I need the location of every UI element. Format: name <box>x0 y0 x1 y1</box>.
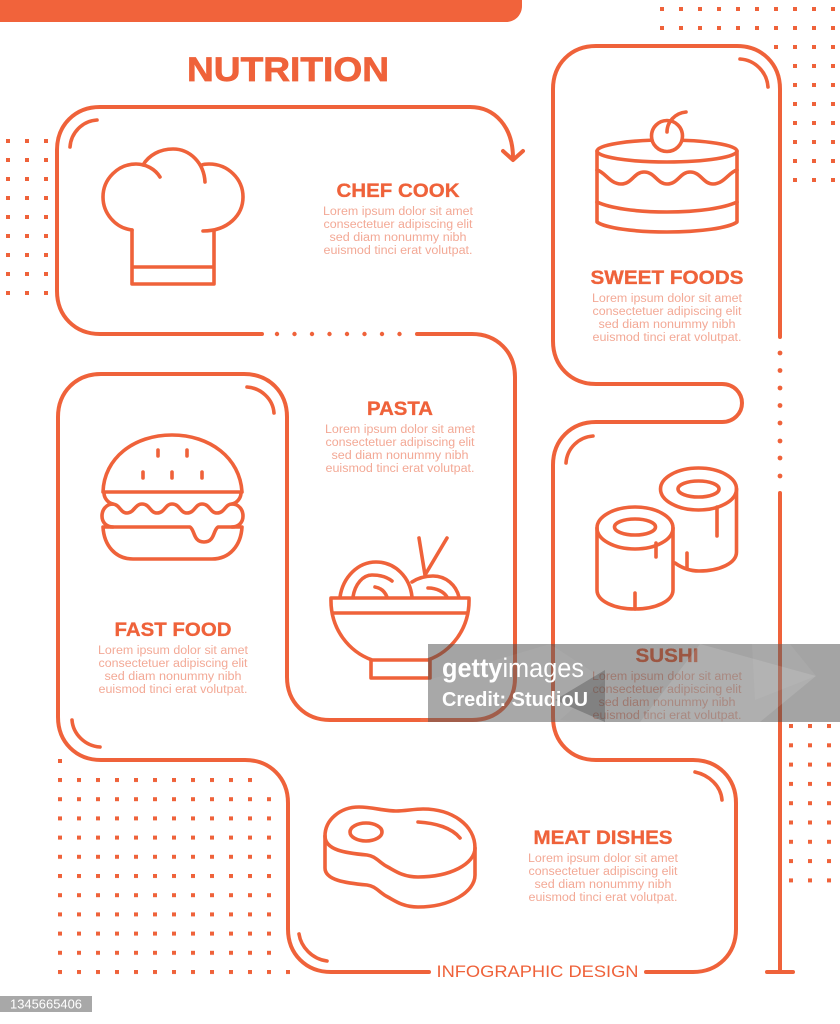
dot grid: left <box>6 139 50 297</box>
panel: sushi <box>566 436 743 722</box>
image id tag: 1345665406 <box>10 998 82 1012</box>
connector line: snaking path through all panels <box>57 46 793 972</box>
text: chef cook description <box>323 206 474 257</box>
text: sweet foods description: euismod tinci erat volutpat. <box>592 332 742 344</box>
text: meat dishes description: euismod tinci erat volutpat. <box>528 892 678 904</box>
top banner bar <box>0 0 522 22</box>
text: sweet foods description: consectetuer adipiscing elit <box>592 306 742 318</box>
heading: fast food: FAST FOOD <box>114 620 232 641</box>
text: sweet foods description: Lorem ipsum dolor sit amet <box>592 293 743 305</box>
text: sweet foods description: sed diam nonummy nibh <box>598 319 736 331</box>
panel: meat dishes <box>299 772 722 961</box>
watermark banner: gettyimages <box>442 653 584 683</box>
icon: chef hat <box>70 120 243 284</box>
icon: burger <box>72 387 274 747</box>
icon: noodle bowl <box>331 538 469 678</box>
panel: fast food <box>72 387 274 747</box>
text: chef cook description: Lorem ipsum dolor sit amet <box>323 206 474 218</box>
text: sushi description: consectetuer adipiscing elit <box>592 684 742 696</box>
heading: meat dishes: MEAT DISHES <box>534 828 672 849</box>
text: pasta description: consectetuer adipiscing elit <box>326 437 475 449</box>
panel: chef cook <box>70 120 474 284</box>
heading: chef cook: CHEF COOK <box>336 181 460 202</box>
text: meat dishes description <box>528 853 679 904</box>
text: fast food description <box>98 645 249 696</box>
text: chef cook description: euismod tinci erat volutpat. <box>324 245 472 257</box>
dot grid: top right <box>660 7 840 184</box>
text: sushi description: Lorem ipsum dolor sit amet <box>592 671 743 683</box>
text: fast food description: euismod tinci erat volutpat. <box>98 684 248 696</box>
text: meat dishes description: Lorem ipsum dolor sit amet <box>528 853 679 865</box>
text: chef cook description: sed diam nonummy nibh <box>330 232 466 244</box>
image id tag <box>0 996 92 1012</box>
text: sushi description: sed diam nonummy nibh <box>598 697 736 709</box>
text: pasta description: Lorem ipsum dolor sit amet <box>325 424 476 436</box>
text: meat dishes description: consectetuer adipiscing elit <box>528 866 678 878</box>
icon: cake <box>597 59 768 232</box>
text: fast food description: consectetuer adipiscing elit <box>98 658 248 670</box>
text: meat dishes description: sed diam nonummy nibh <box>534 879 672 891</box>
watermark banner: Credit: StudioU <box>442 689 588 711</box>
panel: sweet foods <box>590 59 768 344</box>
text: pasta description <box>325 424 476 475</box>
title: NUTRITION <box>187 51 389 89</box>
heading: sweet foods: SWEET FOODS <box>590 268 744 289</box>
text: pasta description: euismod tinci erat volutpat. <box>326 463 474 475</box>
watermark banner <box>420 644 840 722</box>
text: fast food description: sed diam nonummy nibh <box>104 671 242 683</box>
heading: pasta: PASTA <box>367 399 433 420</box>
icon: steak <box>299 772 722 961</box>
heading: sushi: SUSHI <box>636 646 698 667</box>
text: chef cook description: consectetuer adipiscing elit <box>324 219 473 231</box>
text: pasta description: sed diam nonummy nibh <box>332 450 468 462</box>
text: sushi description <box>592 671 743 722</box>
dot grid: bottom right <box>789 724 833 884</box>
icon: sushi rolls <box>566 436 736 609</box>
text: sushi description: euismod tinci erat volutpat. <box>592 710 742 722</box>
panel: pasta <box>325 399 476 678</box>
text: sweet foods description <box>592 293 743 344</box>
dot grid: bottom left <box>58 778 291 976</box>
text: fast food description: Lorem ipsum dolor sit amet <box>98 645 249 657</box>
footer label: infographic design: INFOGRAPHIC DESIGN <box>436 962 638 981</box>
